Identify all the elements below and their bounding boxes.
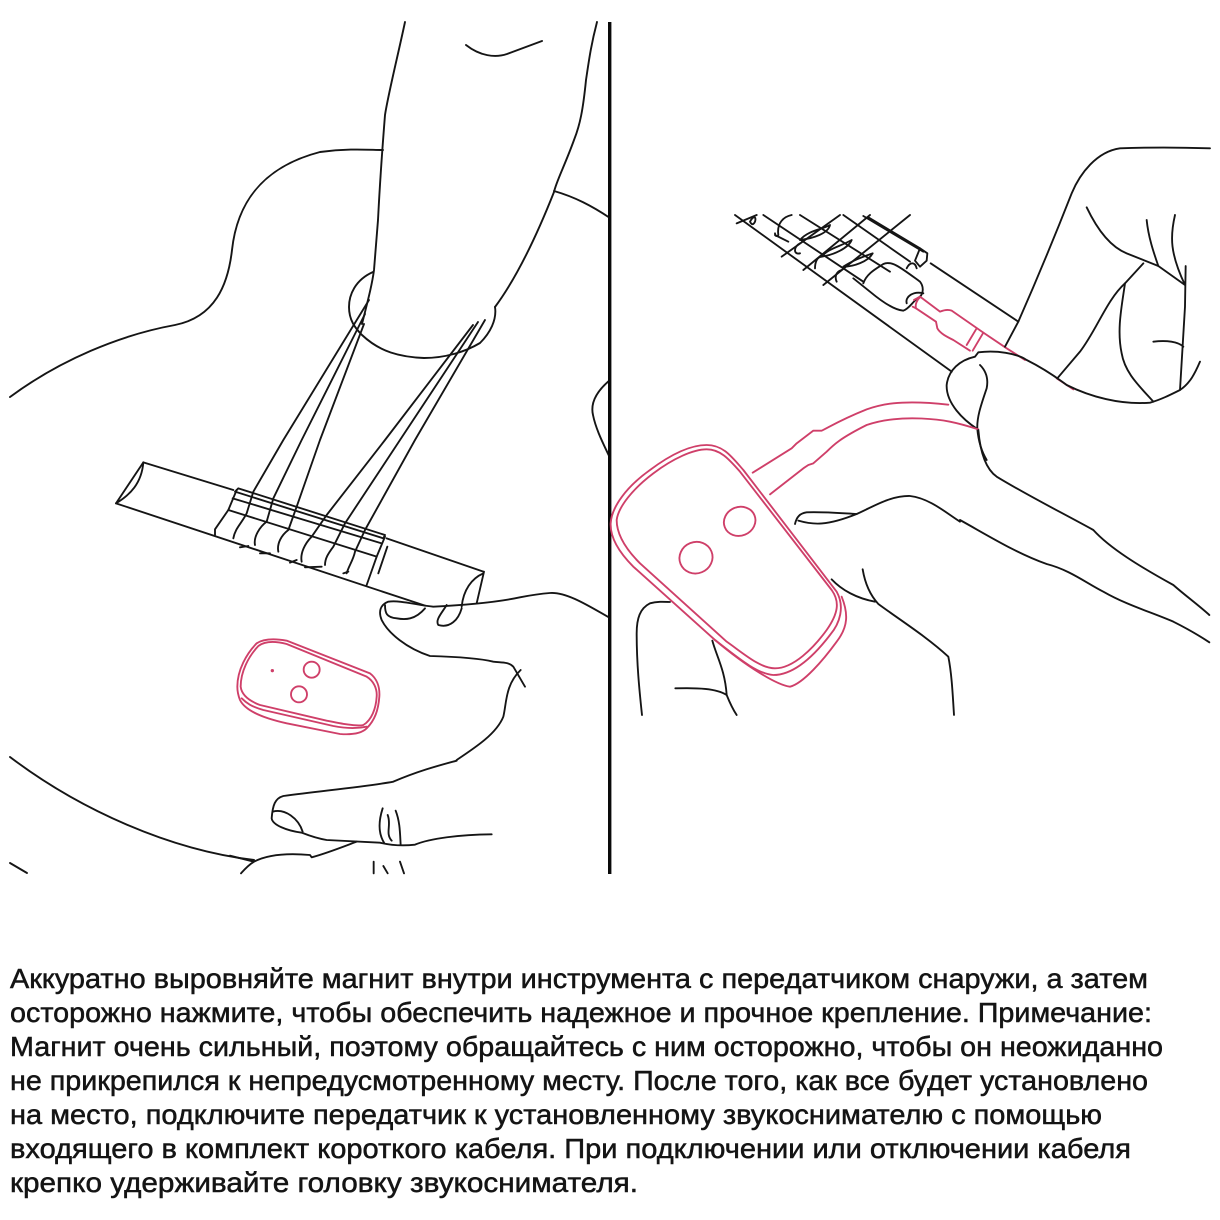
text block: instructions: осторожно нажмите, чтобы обеспечить надежное и прочное крепление. Примечание:: [10, 997, 1152, 1028]
guitar body outline: [10, 150, 610, 873]
transmitter on the guitar body: [237, 639, 379, 734]
text block: instructions: Аккуратно выровняйте магнит внутри инструмента с передатчиком снаружи, а затем: [10, 963, 1148, 994]
panel divider: [608, 22, 611, 874]
text block: instructions: Магнит очень сильный, поэтому обращайтесь с ним осторожно, чтобы он неожиданно: [10, 1031, 1163, 1062]
strings and bridge traced in zoom coordinates: [116, 300, 610, 760]
pink connector: [913, 297, 1073, 389]
transmitter held in hand: [611, 402, 978, 687]
string twists: [750, 215, 873, 282]
long finger on the far right: [960, 430, 1209, 642]
guitar strings: [233, 300, 485, 573]
upper hand holding connector: [947, 148, 1210, 460]
finger pressing over sound hole: [362, 22, 597, 324]
panel: right illustration, cable connected to pickup: [611, 148, 1210, 715]
lower hand: thumb: [637, 602, 737, 715]
cable: [753, 402, 948, 473]
text block: instructions: входящего в комплект короткого кабеля. При подключении или отключении кабеля: [10, 1133, 1131, 1164]
text block: instructions: на место, подключите передатчик к установленному звукоснимателю с помощью: [10, 1099, 1102, 1130]
text block: instructions: [10, 963, 1163, 1198]
sound hole: [349, 272, 495, 358]
hand under the bridge: [380, 593, 610, 760]
lower finger and palm: [230, 761, 492, 873]
bridge: [116, 462, 484, 607]
text block: instructions: не прикрепился к непредусмотренному месту. После того, как все будет установлено: [10, 1065, 1148, 1096]
lower hand: index finger: [795, 496, 960, 715]
panel: left illustration, transmitter placed on guitar: [10, 22, 610, 873]
text block: instructions: крепко удерживайте головку звукоснимателя.: [10, 1167, 638, 1198]
jack plug: [853, 263, 923, 311]
instrument strip with strings: [735, 215, 1018, 372]
